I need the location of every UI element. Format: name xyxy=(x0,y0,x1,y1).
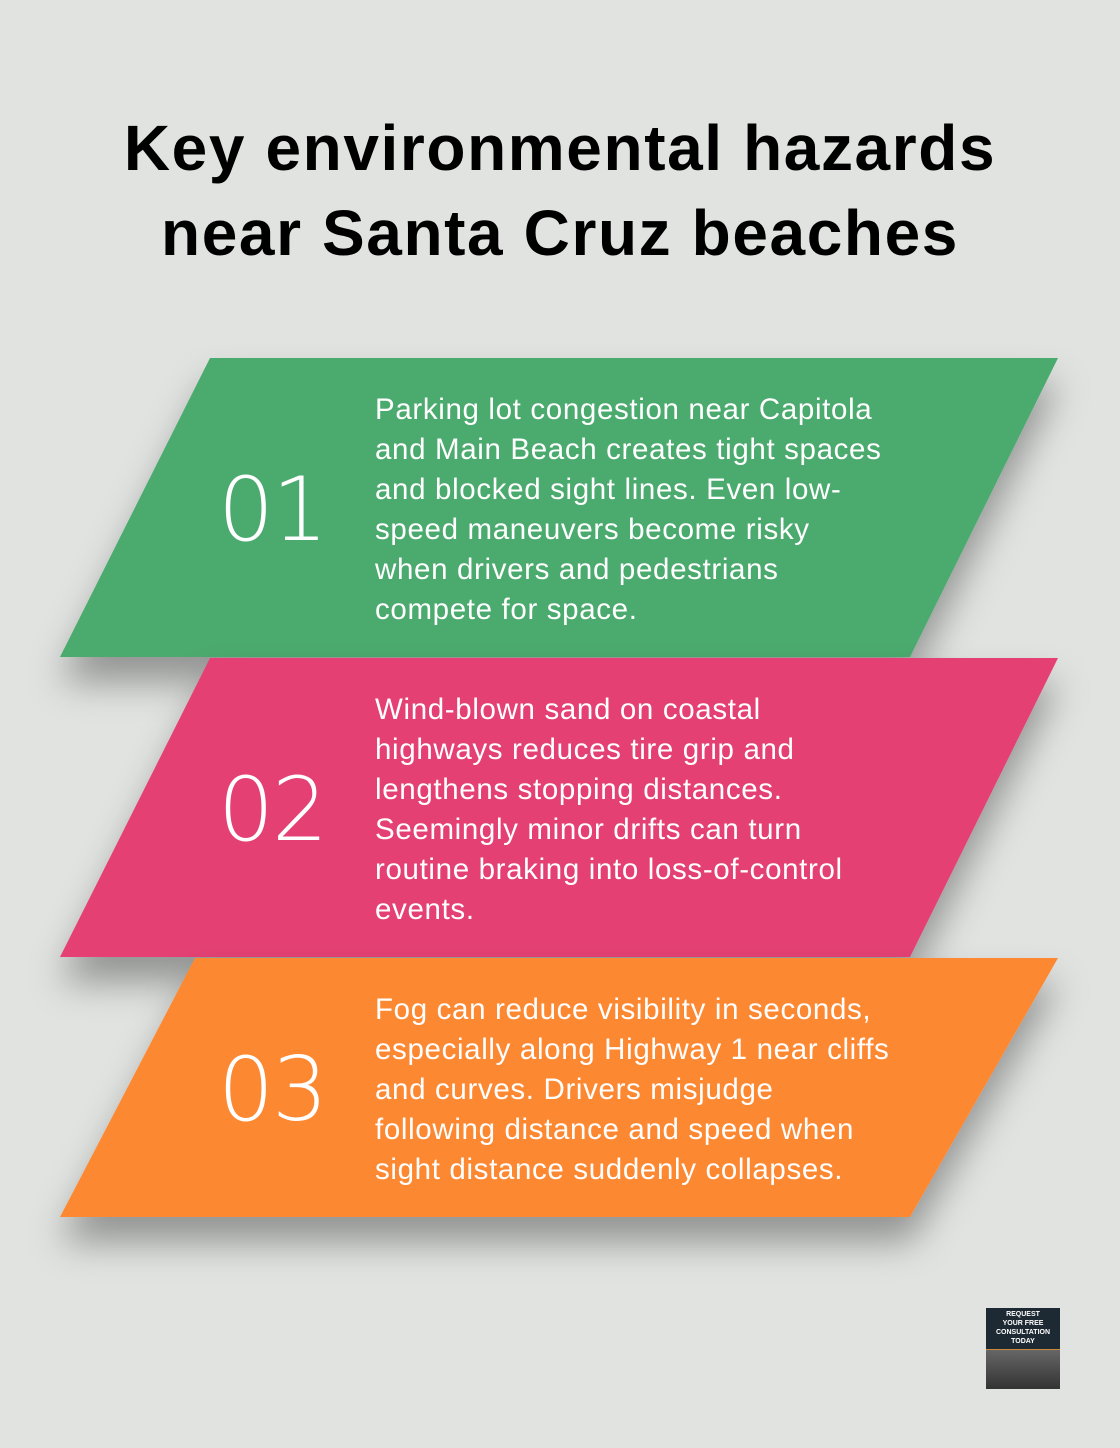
item 03 xyxy=(218,993,889,1186)
item 01 xyxy=(218,393,882,626)
text 01 xyxy=(375,393,882,626)
band 3 xyxy=(60,958,1058,1217)
text 01: speed maneuvers become risky xyxy=(375,513,810,546)
logo: consultation badge xyxy=(986,1308,1060,1388)
text 02: Seemingly minor drifts can turn xyxy=(375,813,802,846)
title: near Santa Cruz beaches xyxy=(161,197,959,269)
text 03: especially along Highway 1 near cliffs xyxy=(375,1033,889,1066)
band 2 xyxy=(60,658,1058,957)
text 01: and blocked sight lines. Even low- xyxy=(375,473,842,506)
text 02: lengthens stopping distances. xyxy=(375,773,783,806)
logo: consultation badge: CONSULTATION xyxy=(996,1329,1050,1336)
text 03 xyxy=(375,993,889,1186)
band 1 xyxy=(60,358,1058,657)
text 02: highways reduces tire grip and xyxy=(375,733,795,766)
text 03: following distance and speed when xyxy=(375,1113,854,1146)
text 02: routine braking into loss-of-control xyxy=(375,853,843,886)
text 01: and Main Beach creates tight spaces xyxy=(375,433,882,466)
item 02 xyxy=(218,693,843,926)
text 03: sight distance suddenly collapses. xyxy=(375,1153,843,1186)
number 02: 02 xyxy=(218,758,326,861)
logo: consultation badge: REQUEST xyxy=(1006,1311,1040,1318)
text 02: events. xyxy=(375,893,475,926)
logo: consultation badge: YOUR FREE xyxy=(1003,1320,1043,1327)
number 03: 03 xyxy=(218,1038,326,1141)
logo: consultation badge: TODAY xyxy=(1011,1338,1035,1345)
title xyxy=(124,112,996,269)
title: Key environmental hazards xyxy=(124,112,996,184)
text 03: and curves. Drivers misjudge xyxy=(375,1073,774,1106)
text 01: Parking lot congestion near Capitola xyxy=(375,393,872,426)
text 03: Fog can reduce visibility in seconds, xyxy=(375,993,871,1026)
text 01: when drivers and pedestrians xyxy=(375,553,779,586)
text 02 xyxy=(375,693,843,926)
text 01: compete for space. xyxy=(375,593,638,626)
text 02: Wind-blown sand on coastal xyxy=(375,693,761,726)
number 01: 01 xyxy=(218,458,326,561)
